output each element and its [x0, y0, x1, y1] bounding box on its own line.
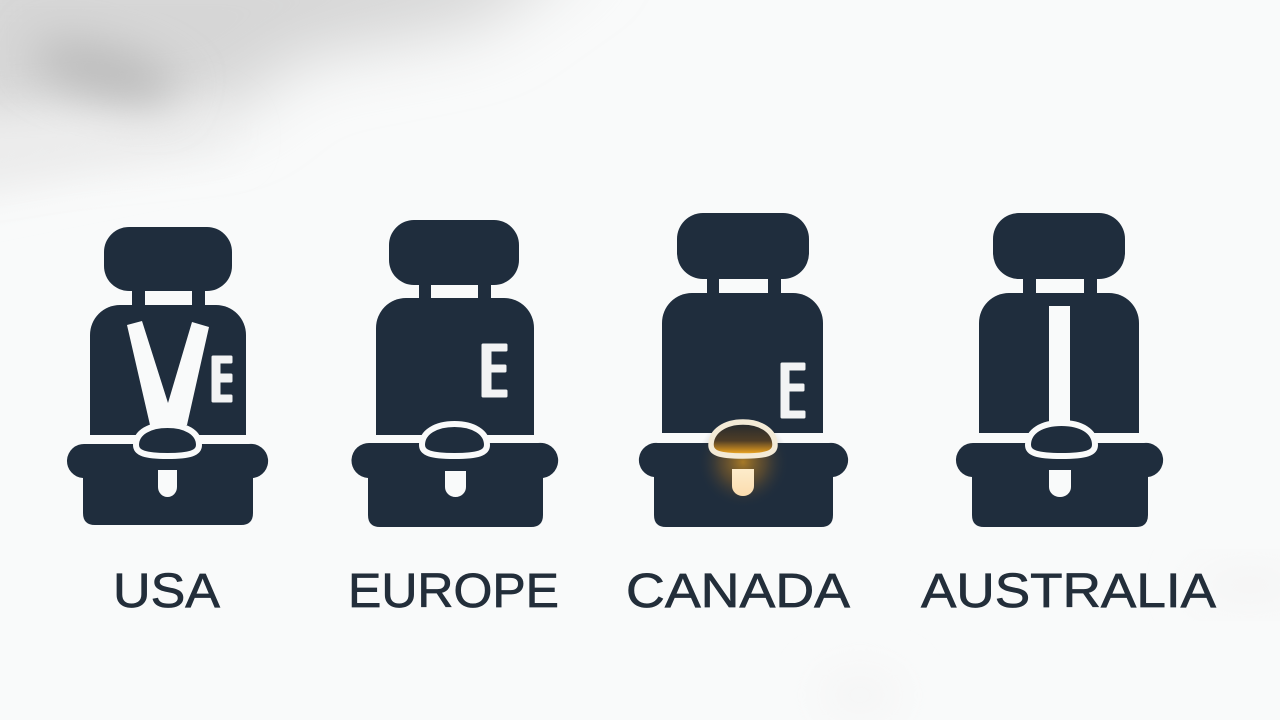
seat base	[956, 443, 1163, 527]
V harness straps	[127, 321, 209, 425]
buckle glow	[697, 416, 789, 508]
single vertical strap	[1049, 306, 1070, 426]
seat base	[67, 444, 268, 525]
seat: Europe	[351, 220, 558, 527]
seat: USA	[67, 227, 268, 525]
headrest	[677, 213, 809, 279]
label: Canada: CANADA	[626, 565, 850, 618]
glowing tongue	[732, 469, 754, 496]
seat back	[662, 293, 823, 433]
tongue	[445, 471, 466, 497]
tongue	[158, 470, 177, 497]
label: Europe: EUROPE	[348, 565, 559, 618]
seat: Canada	[639, 213, 848, 527]
label: Australia: AUSTRALIA	[921, 565, 1216, 618]
tongue	[1049, 470, 1071, 497]
seat base	[639, 443, 848, 527]
seat back	[376, 298, 534, 435]
label: USA: USA	[113, 565, 220, 618]
seat back	[979, 293, 1139, 433]
buckle	[1028, 423, 1095, 456]
seat base	[351, 443, 558, 527]
headrest	[104, 227, 232, 291]
headrest posts	[419, 282, 491, 302]
headrest posts	[1023, 276, 1097, 296]
seat: Australia	[956, 213, 1163, 527]
buckle	[136, 425, 199, 456]
headrest posts	[132, 288, 205, 308]
buckle	[422, 424, 487, 456]
E label	[782, 364, 804, 417]
headrest posts	[707, 276, 781, 296]
seat back	[90, 305, 246, 435]
glowing buckle	[711, 422, 775, 456]
E label	[483, 345, 506, 396]
E label	[213, 357, 231, 401]
headrest	[993, 213, 1125, 279]
headrest	[389, 220, 519, 285]
